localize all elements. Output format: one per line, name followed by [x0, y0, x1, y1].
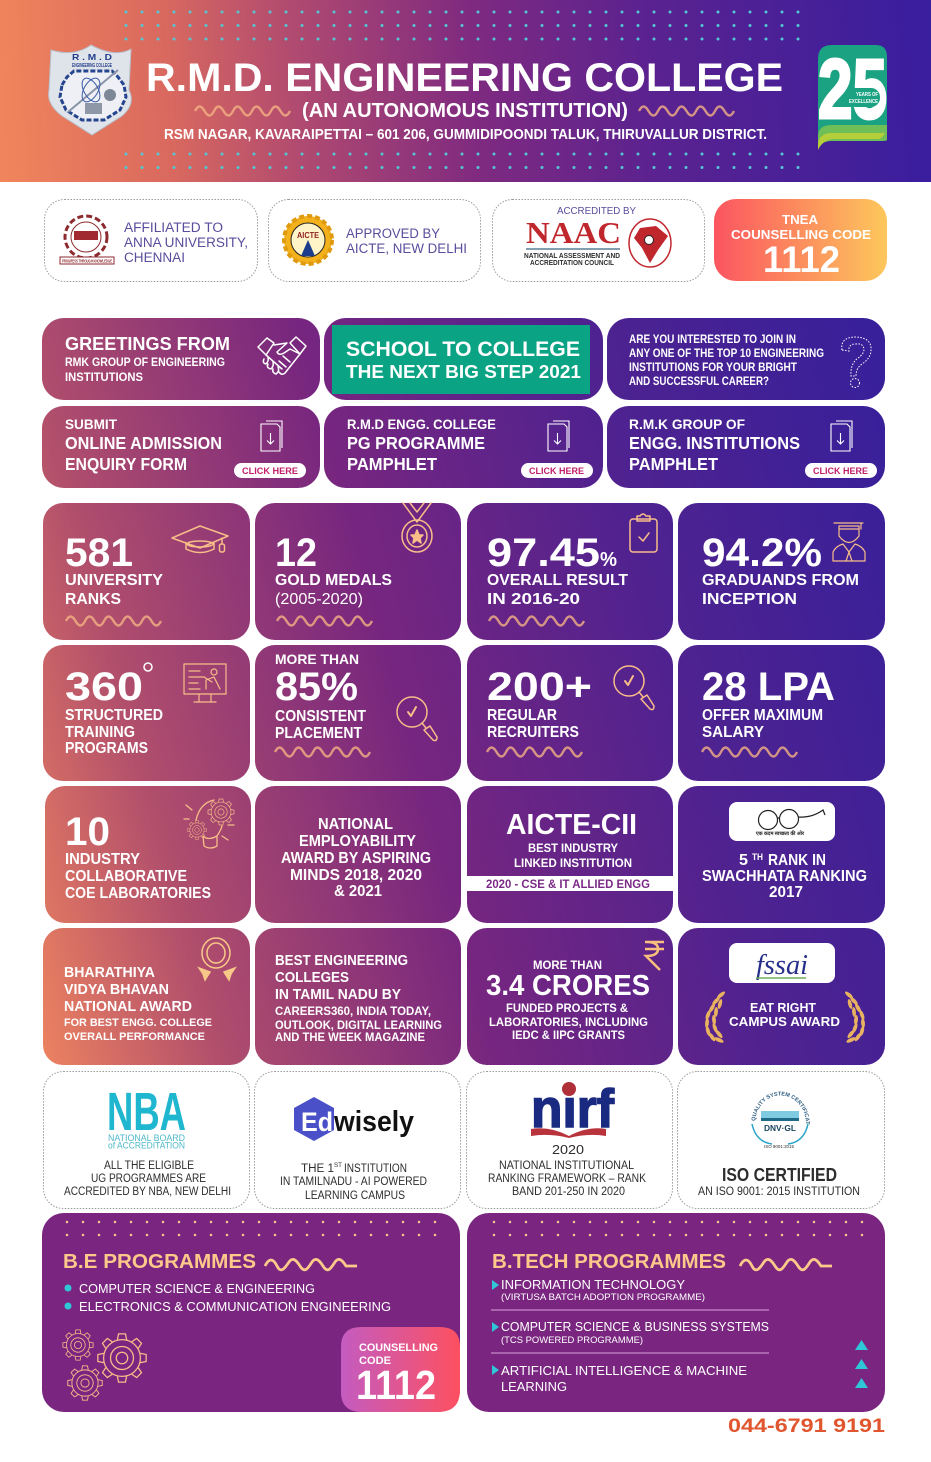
stat card: employability award: & 2021: [334, 883, 382, 900]
panel: nirf: 2020: [552, 1142, 584, 1157]
logo: nba: [107, 1082, 186, 1152]
panel: online admission: [42, 406, 320, 488]
logo: dnv-gl certification: ISO 9001:2015: [764, 1144, 794, 1149]
programme: ai and ml: ARTIFICIAL INTELLIGENCE & MACHINE: [501, 1363, 747, 1378]
panel: naac: [492, 200, 704, 282]
stat card: 581 university ranks: 581: [65, 531, 133, 575]
logo: fssai: [729, 943, 835, 983]
stat card: 10 coe laboratories: INDUSTRY: [65, 851, 141, 868]
button: click here: [521, 463, 593, 478]
stat card: employability award: AWARD BY ASPIRING: [281, 850, 431, 867]
stat card: swachhata ranking: RANK IN: [768, 852, 826, 869]
text: edwisely note: ST: [334, 1162, 342, 1169]
text: edwisely note: LEARNING CAMPUS: [305, 1190, 405, 1202]
text: nba note: [64, 1160, 231, 1198]
logo: naac: NAAC: [526, 215, 621, 250]
logo: nba: NBA: [107, 1082, 186, 1142]
text: affiliated: [124, 220, 248, 265]
stat card: 10 coe laboratories: COE LABORATORIES: [65, 885, 211, 902]
text: nba note: UG PROGRAMMES ARE: [91, 1173, 206, 1185]
stat card: best engineering colleges: [255, 928, 461, 1065]
panel: iso: AN ISO 9001: 2015 INSTITUTION: [698, 1186, 860, 1198]
logo: nba: of ACCREDITATION: [108, 1140, 185, 1152]
logo: fssai: fssai: [756, 950, 808, 981]
panel: rmk pamphlet: R.M.K GROUP OF: [629, 416, 745, 432]
callout: counselling code: 1112: [356, 1362, 436, 1408]
stat card: 12 gold medals: GOLD MEDALS: [275, 572, 392, 589]
panel: pg programme: R.M.D ENGG. COLLEGE: [347, 416, 496, 432]
bullet list: ELECTRONICS & COMMUNICATION ENGINEERING: [79, 1299, 391, 1314]
stat card: 581 university ranks: RANKS: [65, 591, 121, 608]
logo: nba: NATIONAL BOARD: [108, 1133, 185, 1144]
panel: career question: ARE YOU INTERESTED TO JOIN IN: [629, 334, 796, 346]
stat card: 85% placement: MORE THAN: [275, 651, 359, 667]
icon: award rosette: [199, 938, 235, 980]
panel: b.tech programmes: [467, 1213, 885, 1412]
text: edwisely note: THE 1: [301, 1163, 334, 1175]
stat card: 581 university ranks: [43, 503, 250, 640]
icon: idea gears bulb: [184, 799, 234, 848]
badge: 25 years of excellence: YEARS OF: [856, 92, 878, 98]
text: edwisely note: INSTITUTION: [344, 1163, 407, 1175]
icon: aicte seal: AICTE: [297, 230, 319, 240]
icon: laurel right: [844, 990, 865, 1044]
stat card: aicte-cii: AICTE-CII: [506, 809, 637, 841]
title: R.M.D. ENGINEERING COLLEGE: [146, 56, 783, 100]
stat card: eat right campus: [678, 928, 885, 1065]
stat card: 85% placement: PLACEMENT: [275, 725, 362, 742]
stat card: 28 lpa: 28 LPA: [702, 665, 835, 709]
programme: cs and business systems: (TCS POWERED PROGRAMME): [501, 1335, 643, 1346]
text: nirf note: RANKING FRAMEWORK – RANK: [488, 1173, 646, 1185]
icon: gears: [63, 1330, 146, 1400]
stat card: 12 gold medals: (2005-2020): [275, 591, 363, 608]
wave: [265, 1259, 357, 1270]
stat card: 360 training: 360: [65, 665, 143, 709]
stat card: 360 training: [43, 645, 250, 781]
button: click here: [234, 463, 306, 478]
stat card: 94.2% graduands: GRADUANDS FROM: [702, 572, 859, 589]
panel: career question: ANY ONE OF THE TOP 10 ENGINEERING: [629, 348, 824, 360]
stat card: 3.4 crores: IEDC & IIPC GRANTS: [512, 1028, 625, 1042]
icon: laurel left: [705, 990, 726, 1044]
stat card: best engineering colleges: AND THE WEEK MAGAZINE: [275, 1032, 425, 1044]
bullet list: [64, 1281, 391, 1314]
panel: nba: [44, 1072, 250, 1208]
stat card: 3.4 crores: MORE THAN: [533, 958, 602, 972]
stat card: 97.45% overall result: OVERALL RESULT: [487, 572, 629, 589]
stat card: best engineering colleges: CAREERS360, INDIA TODAY,: [275, 1006, 431, 1018]
stat card: 97.45% overall result: %: [600, 549, 617, 571]
stat card: 10 coe laboratories: COLLABORATIVE: [65, 868, 187, 885]
icon: document: [261, 421, 282, 451]
panel: b.e programmes: [42, 1213, 460, 1412]
stat card: 200+ recruiters: RECRUITERS: [487, 724, 579, 741]
programme: cs and business systems: COMPUTER SCIENCE & BUSINESS SYSTEMS: [501, 1319, 769, 1334]
icon: handshake: [258, 337, 306, 374]
stat card: 12 gold medals: [255, 503, 461, 640]
text: affiliated: AFFILIATED TO: [124, 220, 223, 235]
programme: ai and ml: LEARNING: [501, 1379, 567, 1394]
text: edwisely note: IN TAMILNADU - AI POWERED: [280, 1176, 427, 1188]
header banner: [0, 0, 931, 182]
icon: magnifier: [397, 697, 437, 741]
stat card: 94.2% graduands: INCEPTION: [702, 591, 797, 608]
stat card: swachhata ranking: TH: [752, 852, 763, 862]
logo: swachh bharat glasses: एक कदम स्वच्छता की ओर: [755, 830, 805, 837]
panel: iso: [677, 1071, 885, 1209]
stat card: bharathiya vidya bhavan: [43, 928, 250, 1065]
panel: tnea counselling code: [714, 199, 887, 281]
panel: school to college: SCHOOL TO COLLEGE: [346, 338, 580, 361]
text: affiliated: ANNA UNIVERSITY,: [124, 235, 248, 250]
stat card: 3.4 crores: LABORATORIES, INCLUDING: [489, 1015, 648, 1029]
text: edwisely note: [280, 1162, 427, 1202]
bullet list: COMPUTER SCIENCE & ENGINEERING: [79, 1281, 315, 1296]
icon: anna university seal: [60, 216, 114, 264]
panel: school to college: [324, 318, 603, 400]
panel: aicte: [268, 200, 480, 282]
stat card: 97.45% overall result: [467, 503, 673, 640]
icon: aicte seal: [284, 216, 332, 264]
icon: rupee: [645, 942, 664, 970]
text: nirf note: NATIONAL INSTITUTIONAL: [499, 1160, 635, 1172]
stat card: 10 coe laboratories: 10: [65, 810, 110, 854]
icon: anna university seal: PROGRESS THROUGH KNOWLEDGE: [62, 258, 112, 264]
phone number: 044-6791 9191: [728, 1416, 886, 1437]
panel: greetings: INSTITUTIONS: [65, 372, 143, 384]
panel: rmk pamphlet: [607, 406, 885, 488]
stat card: employability award: [255, 786, 461, 923]
icon: presentation screen: [184, 664, 226, 702]
panel: pg programme: [324, 406, 603, 488]
icon: graduate: [833, 523, 865, 561]
stat card: 360 training: TRAINING: [65, 724, 135, 741]
logo: dnv-gl certification: DNV·GL: [764, 1124, 796, 1133]
icon: college crest: R . M . D: [72, 52, 112, 62]
stat card: 94.2% graduands: 94.2%: [702, 531, 822, 575]
wave right: [639, 106, 734, 116]
stat card: 200+ recruiters: REGULAR: [487, 707, 557, 724]
stat card: 10 coe laboratories: [45, 786, 251, 923]
stat card: best engineering colleges: OUTLOOK, DIGITAL LEARNING: [275, 1020, 442, 1032]
stat card: 28 lpa: OFFER MAXIMUM: [702, 707, 823, 724]
button: click here: [805, 463, 877, 478]
stat card: eat right campus: EAT RIGHT: [750, 1000, 816, 1015]
logo: edwisely: Ed: [301, 1107, 333, 1137]
stat card: best engineering colleges: IN TAMIL NADU BY: [275, 987, 401, 1003]
stat card: best engineering colleges: BEST ENGINEERING: [275, 953, 408, 969]
subtitle: (AN AUTONOMOUS INSTITUTION): [302, 100, 628, 122]
icon: medal: [402, 503, 432, 552]
programme: information technology: [492, 1277, 705, 1303]
text: approved: AICTE, NEW DELHI: [346, 241, 467, 256]
stat card: eat right campus: CAMPUS AWARD: [729, 1014, 840, 1029]
stat card: 200+ recruiters: [467, 645, 673, 781]
stat card: swachhata ranking: 2017: [769, 884, 803, 901]
badge: 25 years of excellence: 25: [818, 42, 887, 136]
stat card: bharathiya vidya bhavan: NATIONAL AWARD: [64, 999, 192, 1015]
programme: cs and business systems: [492, 1319, 769, 1346]
panel: greetings: RMK GROUP OF ENGINEERING: [65, 357, 225, 369]
panel: nirf: [466, 1072, 672, 1208]
icon: magnifier: [614, 666, 654, 710]
panel: tnea counselling code: TNEA: [782, 212, 819, 227]
stat card: aicte-cii: LINKED INSTITUTION: [514, 856, 632, 870]
logo: nirf: nirf: [531, 1079, 615, 1139]
panel: pg programme: PG PROGRAMME: [347, 433, 485, 453]
callout: counselling code: CODE: [359, 1355, 391, 1367]
panel: iso: ISO CERTIFIED: [722, 1165, 837, 1185]
panel: anna university: [44, 200, 258, 282]
programme: information technology: INFORMATION TECHNOLOGY: [501, 1277, 685, 1292]
text: nba note: ALL THE ELIGIBLE: [104, 1160, 194, 1172]
stat card: bharathiya vidya bhavan: OVERALL PERFORMANCE: [64, 1031, 205, 1043]
heading: B.TECH PROGRAMMES: [492, 1251, 726, 1273]
icon: document: [831, 421, 852, 451]
stat card: employability award: EMPLOYABILITY: [299, 833, 417, 850]
naac full name: [524, 253, 620, 267]
button: click here: CLICK HERE: [242, 466, 298, 477]
stat card: aicte-cii: BEST INDUSTRY: [528, 841, 618, 855]
stat card: 3.4 crores: FUNDED PROJECTS &: [506, 1001, 628, 1015]
text: nirf note: [488, 1160, 646, 1198]
panel: online admission: ENQUIRY FORM: [65, 454, 187, 474]
stat card: 85% placement: [255, 645, 461, 781]
stat card: 3.4 crores: [467, 928, 673, 1065]
stat card: 360 training: STRUCTURED: [65, 707, 163, 724]
icon: up triangles: [855, 1340, 868, 1388]
text: affiliated: CHENNAI: [124, 250, 185, 265]
stat card: aicte-cii: [467, 786, 673, 923]
stat card: bharathiya vidya bhavan: BHARATHIYA: [64, 965, 156, 981]
stat card: 360 training: PROGRAMS: [65, 740, 148, 757]
text: accredited by: ACCREDITED BY: [557, 205, 636, 217]
icon: question mark: [842, 337, 871, 388]
logo: dnv-gl certification: [751, 1092, 810, 1149]
icon: college crest: ENGINEERING COLLEGE: [72, 63, 112, 69]
text: nirf note: BAND 201-250 IN 2020: [512, 1186, 625, 1198]
programme: ai and ml: [492, 1363, 747, 1394]
callout: counselling code: COUNSELLING: [359, 1342, 438, 1354]
heading: B.E PROGRAMMES: [63, 1251, 256, 1273]
badge: 25 years of excellence: [818, 42, 887, 150]
programme: information technology: (VIRTUSA BATCH ADOPTION PROGRAMME): [501, 1292, 705, 1303]
stat card: 85% placement: CONSISTENT: [275, 708, 366, 725]
stat card: 200+ recruiters: 200+: [487, 665, 592, 709]
panel: tnea counselling code: 1112: [763, 239, 840, 280]
stat card: 28 lpa: SALARY: [702, 724, 765, 741]
panel: greetings: [42, 318, 320, 400]
panel: online admission: ONLINE ADMISSION: [65, 433, 222, 453]
icon: clipboard: [630, 514, 657, 552]
rule: [526, 248, 620, 250]
address: RSM NAGAR, KAVARAIPETTAI – 601 206, GUMMIDIPOONDI TALUK, THIRUVALLUR DISTRICT.: [164, 127, 767, 143]
logo: edwisely: wisely: [333, 1106, 414, 1138]
badge: 25 years of excellence: EXCELLENCE: [849, 99, 879, 105]
stat card: bharathiya vidya bhavan: FOR BEST ENGG. COLLEGE: [64, 1017, 212, 1029]
stat card: 12 gold medals: 12: [275, 531, 317, 575]
panel: tnea counselling code: COUNSELLING CODE: [731, 227, 871, 242]
panel: online admission: SUBMIT: [65, 416, 117, 432]
text: approved: [346, 226, 467, 256]
panel: edwisely: [254, 1072, 460, 1208]
stat card: 97.45% overall result: IN 2016-20: [487, 591, 580, 608]
icon: college crest: [49, 45, 131, 135]
stat card: 85% placement: 85%: [275, 665, 358, 709]
logo: edwisely: [294, 1097, 414, 1141]
stat card: 97.45% overall result: 97.45: [487, 531, 600, 575]
naac full name: ACCREDITATION COUNCIL: [530, 260, 615, 267]
stat card: 3.4 crores: 3.4 CRORES: [486, 970, 650, 1002]
panel: career question: AND SUCCESSFUL CAREER?: [629, 376, 769, 388]
panel: greetings: GREETINGS FROM: [65, 334, 230, 354]
icon: naac emblem: [629, 219, 671, 267]
wave left: [195, 106, 290, 116]
button: click here: CLICK HERE: [529, 466, 584, 477]
panel: career question: INSTITUTIONS FOR YOUR BRIGHT: [629, 362, 797, 374]
stat card: 94.2% graduands: [678, 503, 885, 640]
stat card: swachhata ranking: [678, 786, 885, 923]
panel: career question: [607, 318, 885, 400]
icon: graduation cap: [172, 526, 228, 552]
panel: rmk pamphlet: PAMPHLET: [629, 454, 718, 474]
naac full name: NATIONAL ASSESSMENT AND: [524, 253, 620, 260]
wave: [740, 1259, 832, 1270]
stat card: aicte-cii: 2020 - CSE & IT ALLIED ENGG: [486, 877, 650, 891]
stat card: bharathiya vidya bhavan: VIDYA BHAVAN: [64, 982, 169, 998]
text: nba note: ACCREDITED BY NBA, NEW DELHI: [64, 1186, 231, 1198]
stat card: swachhata ranking: 5: [739, 852, 748, 869]
icon: document: [548, 421, 569, 451]
text: approved: APPROVED BY: [346, 226, 440, 241]
stat card: 28 lpa: [678, 645, 885, 781]
logo: dnv-gl certification: QUALITY SYSTEM CERTIFICATION: [752, 1092, 810, 1124]
stat card: employability award: MINDS 2018, 2020: [290, 867, 422, 884]
stat card: 581 university ranks: UNIVERSITY: [65, 572, 164, 589]
stat card: employability award: NATIONAL: [318, 816, 393, 833]
stat card: swachhata ranking: SWACHHATA RANKING: [702, 868, 867, 885]
panel: pg programme: PAMPHLET: [347, 454, 437, 474]
button: click here: CLICK HERE: [813, 466, 868, 477]
logo: swachh bharat glasses: [729, 802, 835, 841]
stat card: best engineering colleges: COLLEGES: [275, 970, 349, 986]
panel: rmk pamphlet: ENGG. INSTITUTIONS: [629, 433, 800, 453]
callout: counselling code: [341, 1327, 460, 1412]
panel: school to college: THE NEXT BIG STEP 2021: [346, 362, 581, 382]
